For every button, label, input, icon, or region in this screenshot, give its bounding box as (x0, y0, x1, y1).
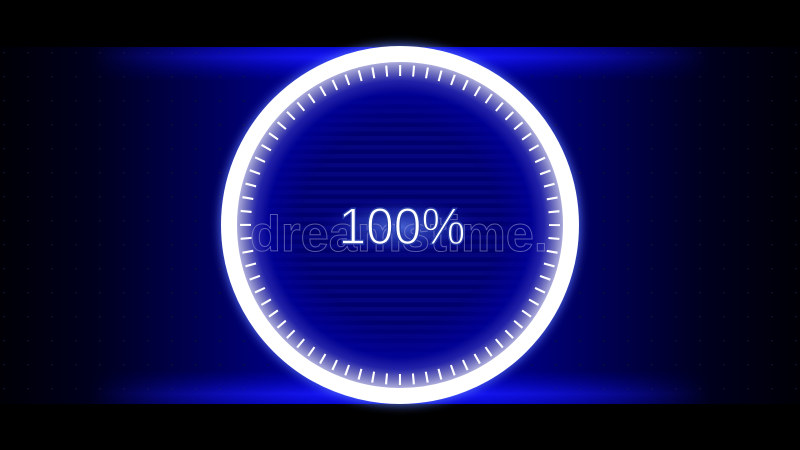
background: blue horizontal band (0, 47, 800, 404)
gauge inner disc (236, 61, 564, 389)
watermark text: dreamstime. (250, 206, 548, 262)
tick marks: 72 around the dial (246, 70, 554, 380)
glow behind percentage (315, 197, 485, 257)
percentage value: 100% (338, 198, 466, 256)
white progress ring (229, 54, 571, 396)
ring outer glow (225, 50, 575, 400)
